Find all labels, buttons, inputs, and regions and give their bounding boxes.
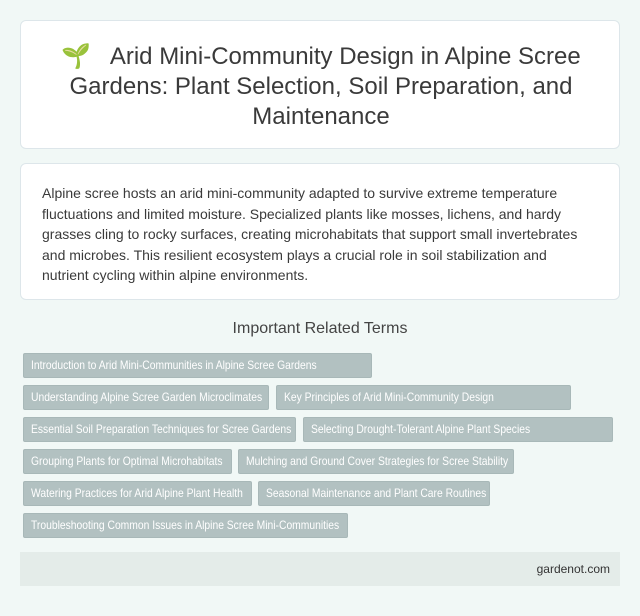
tag: [303, 417, 613, 442]
title: 🌱 Arid Mini-Community Design in Alpine Scree Gardens: Plant Selection, Soil Preparation, and Maintenance: [61, 43, 581, 130]
tag: [276, 385, 571, 410]
tag: Introduction to Arid Mini-Communities in Alpine Scree Gardens: [31, 358, 317, 372]
tag: Seasonal Maintenance and Plant Care Routines: [266, 486, 486, 500]
tag: [23, 449, 232, 474]
description text: Alpine scree hosts an arid mini-community adapted to survive extreme temperature fluctuations and limited moisture. Specialized plants like mosses, lichens, and hardy grasses cling to rocky surfaces, creating microhabitats that support small invertebrates and microbes. This resilient ecosystem plays a crucial role in soil stabilization and nutrient cycling within alpine environments.: [42, 185, 577, 283]
tag: [23, 385, 269, 410]
tag: Mulching and Ground Cover Strategies for Scree Stability: [246, 454, 508, 468]
heading: related terms: Important Related Terms: [233, 320, 407, 337]
tag: Grouping Plants for Optimal Microhabitats: [31, 454, 223, 468]
footer text: gardenot.com: [537, 562, 610, 576]
tag: Essential Soil Preparation Techniques for Scree Gardens: [31, 422, 291, 436]
tag: [23, 513, 348, 538]
tag: [23, 481, 252, 506]
description card: [20, 163, 620, 300]
title card: [20, 20, 620, 149]
tag: [258, 481, 490, 506]
tag: Key Principles of Arid Mini-Community Design: [284, 390, 494, 404]
tag: [23, 417, 296, 442]
tag: [23, 353, 372, 378]
tag: [238, 449, 514, 474]
tag: Understanding Alpine Scree Garden Microclimates: [31, 390, 262, 404]
tag: Selecting Drought-Tolerant Alpine Plant Species: [311, 422, 530, 436]
footer: [20, 552, 620, 586]
tag: Troubleshooting Common Issues in Alpine Scree Mini-Communities: [31, 518, 339, 532]
tag: Watering Practices for Arid Alpine Plant Health: [31, 486, 243, 500]
